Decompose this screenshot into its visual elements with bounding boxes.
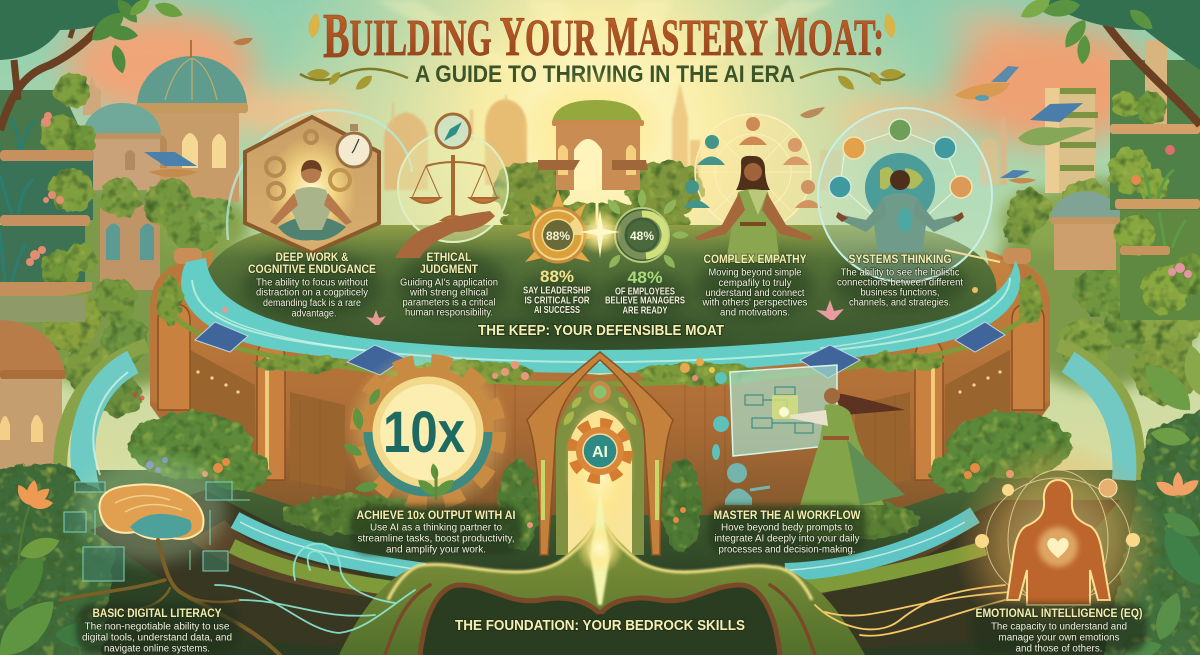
moat: outer grass ring and rivers [0,345,1200,655]
text: systems thinking: SYSTEMS THINKING [848,254,952,266]
skyscraper [83,76,101,115]
title: YOUR MASTERY MOAT: [500,6,930,68]
text: emotional intelligence [972,603,1147,654]
stat text 88% [523,267,591,316]
stat badge 48% [595,189,689,270]
text: complex empathy [702,254,808,318]
stat text 88%: SAY LEADERSHIP [523,286,591,296]
text: systems thinking: business functions, [860,288,940,298]
midground bushes [40,178,233,417]
text: deep work and cognitive endurance: distraction on a cogpiticely [256,288,368,298]
text: deep work and cognitive endurance: The ability to focus without [256,278,368,288]
text: achieve 10x output: ACHIEVE 10x OUTPUT WITH AI [356,510,516,522]
robot [725,463,770,505]
bottom-left dome [0,320,66,470]
text: complex empathy: with others' perspectives [702,298,808,308]
text: ethical judgment: with streng elhical [409,288,488,298]
text: ethical judgment: JUDGMENT [420,264,478,276]
title [323,0,884,88]
planters [1108,40,1200,320]
meditating person [270,160,352,240]
emotional intelligence figure [953,440,1163,650]
illustration: complex empathy [684,114,822,262]
title vine ornaments [300,12,905,93]
text: systems thinking: channels, and strategies. [849,298,951,308]
stat text 88%: 88% [540,267,574,286]
hand [395,211,495,258]
right cityscape: tower, dome, planters, vehicles [233,38,1200,404]
text: achieve 10x output: and amplify your work. [386,544,486,556]
inner plateau [200,225,996,358]
trees in the corners [0,0,1200,130]
left vehicle [144,152,198,177]
text: ethical judgment: parameters is a critical [402,298,496,308]
glowing streams [215,544,1010,636]
planters [0,72,97,322]
stat badge 88%: 88% [546,229,570,243]
text: basic digital literacy: The non-negotiable ability to use [84,622,230,632]
stat badge 88% [516,190,600,262]
stat text 48%: ARE READY [622,306,668,316]
text: ethical judgment [400,252,498,318]
foreground leaves and flowers right [1123,343,1200,655]
text: ethical judgment: Guiding AI's application [400,278,498,288]
title: B [323,0,350,71]
stat badge 48%: 48% [630,229,654,243]
compass [436,114,470,148]
text: master the AI workflow [708,505,866,556]
text: complex empathy: understand and connect [706,288,805,299]
stat text 48%: BELIEVE MANAGERS [605,296,685,306]
rim grass and solar panels [158,276,1042,386]
stat text 88%: IS CRITICAL FOR [524,296,590,306]
silhouettes [739,117,822,208]
stat text 48%: OF EMPLOYEES [615,286,675,298]
title: UILDING [350,10,500,67]
AI gate [527,352,673,555]
subtitle: A GUIDE TO THRIVING IN THE AI ERA [415,61,795,88]
scale [412,155,497,220]
brain with digital circuits [64,458,250,581]
lower tower [100,205,160,290]
text: emotional intelligence: EMOTIONAL INTELLIGENCE (EQ) [976,608,1143,620]
text: master the AI workflow: MASTER THE AI WORKFLOW [714,510,861,522]
keep river [181,258,1020,373]
text: master the AI workflow: processes and decision-making. [718,544,856,556]
vehicle top center right [800,107,825,118]
stat text 88%: AI SUCCESS [534,305,580,316]
stat text 48%: 48% [628,268,662,287]
woman [695,156,813,262]
golden glow lines [388,510,812,600]
text: emotional intelligence: manage your own emotions [998,632,1120,644]
roots of the brain [60,540,280,655]
workflow icons [712,372,729,460]
text: achieve 10x output: Use AI as a thinking partner to [370,522,502,534]
lower moat with earth bank [90,490,1120,655]
sprout and laurel [342,387,457,499]
orbs [889,119,911,141]
wall of the keep [150,248,1050,515]
woman figure [790,388,905,505]
text: achieve 10x output [350,505,522,556]
heading: the keep: THE KEEP: YOUR DEFENSIBLE MOAT [478,323,724,339]
text: ethical judgment: human responsibility. [405,308,493,318]
stopwatch [337,124,371,167]
text: complex empathy: cempafily to truly [718,278,792,289]
text: basic digital literacy: digital tools, understand data, and [82,632,232,644]
text: emotional intelligence: The capacity to understand and [991,622,1127,632]
AI gear: AI [592,444,608,461]
icon: 10x gear [342,347,513,517]
central glowing star [578,210,622,258]
text: master the AI workflow: integrate AI deeply into your daily [714,534,860,544]
AI workflow panel [730,365,837,456]
stat text 48% [605,268,685,316]
left cityscape: domes, towers, planters [0,40,250,470]
big dome [135,40,248,202]
icon: ethical scale [395,114,508,258]
brain [100,484,204,539]
wall shrubs and flowers [128,358,1072,551]
text: master the AI workflow: Hove beyond bedy prompts to [721,522,853,534]
illustration: systems thinking [818,108,1000,282]
lotus flowers [222,287,978,325]
man [836,170,964,252]
text: basic digital literacy [76,603,238,654]
text: basic digital literacy: BASIC DIGITAL LITERACY [92,608,222,620]
AI gear [573,424,627,478]
text: deep work and cognitive endurance: DEEP WORK & [276,252,348,264]
bottom: central root mound [339,490,865,655]
text: systems thinking [837,254,963,308]
text: ethical judgment: ETHICAL [426,252,472,264]
dome [1050,191,1122,270]
text: achieve 10x output: streamline tasks, boost productivity, [358,534,514,544]
illustration: master the workflow [712,365,905,505]
icon: 10x gear: 10x [383,400,465,465]
vehicle top left small [233,38,253,45]
icon: deep work hexagon [227,110,412,253]
text: basic digital literacy: navigate online systems. [104,644,210,654]
text: deep work and cognitive endurance: demanding fack is a rare [263,298,361,309]
text: emotional intelligence: and those of others. [1016,644,1102,654]
text: complex empathy: and motivations. [720,308,790,318]
text: systems thinking: connections between different [837,278,963,288]
vehicles [955,66,1019,101]
text: deep work and cognitive endurance [248,252,376,320]
small dome [83,103,161,190]
central temple [492,70,703,242]
text: systems thinking: The ability to see the holistic [840,268,960,278]
text: complex empathy: COMPLEX EMPATHY [704,254,807,266]
gears [266,131,350,199]
foundation pocket [420,585,780,655]
text: deep work and cognitive endurance: COGNITIVE ENDUGANCE [248,264,376,276]
digital panels [64,482,232,581]
heading: the foundation: THE FOUNDATION: YOUR BEDROCK SKILLS [455,618,745,634]
text: deep work and cognitive endurance: advantage. [292,308,336,320]
distant skyline [384,83,1007,190]
foreground leaves and flowers left [0,479,114,655]
text: complex empathy: Moving beyond simple [708,268,802,278]
